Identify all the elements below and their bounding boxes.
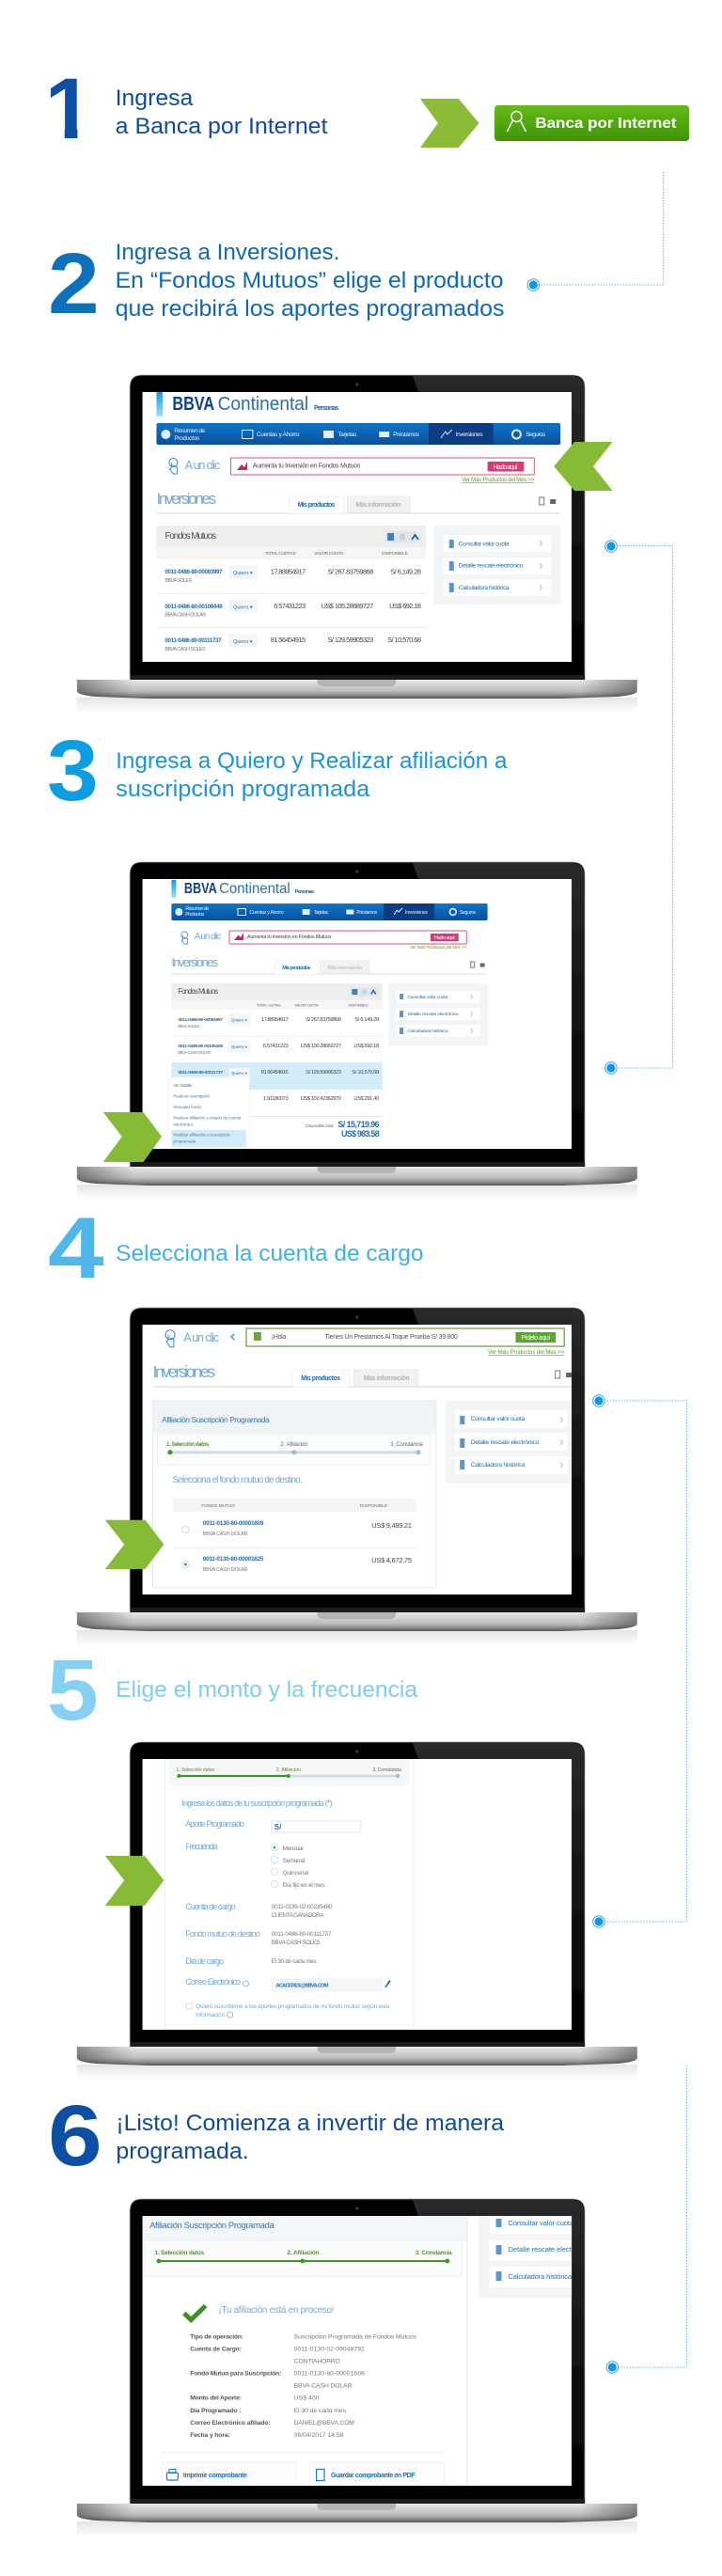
laptop: step 3 <box>77 862 637 1200</box>
arrow: step 5 chevron <box>105 1856 164 1906</box>
step 1 heading: a Banca por Internet <box>116 114 328 139</box>
screen: inversiones: S/ 6,149.28 <box>390 568 421 576</box>
screen: monto y frecuencia: Día fijo en el mes <box>283 1882 325 1889</box>
screen: inversiones: Quiero ▾ <box>233 571 253 576</box>
arrow: step 1 chevron <box>420 99 479 148</box>
step 2 number: 2 <box>48 236 100 332</box>
laptop: step 5 <box>77 1742 637 2080</box>
screen: quiero menu: Tarjetas <box>314 910 328 916</box>
screen: cuenta de cargo: DISPONIBLE <box>360 1503 387 1509</box>
screen: constancia: El 30 de cada mes <box>294 2408 347 2414</box>
screen: cuenta de cargo: 1. Selección datos <box>166 1442 210 1448</box>
screen: quiero menu: A un clic <box>195 932 221 942</box>
screen: cuenta de cargo: A un clic <box>183 1331 219 1344</box>
screen: quiero menu: Productos <box>185 912 205 918</box>
arrow: dotted connector 2 to 3 <box>617 545 673 1068</box>
screen: quiero menu: 0011-0486-80-00111737 <box>178 1070 223 1076</box>
step 2 heading: Ingresa a Inversiones. <box>116 240 339 265</box>
marker: step 2 dot <box>527 279 540 291</box>
screen: quiero menu: Disponible total <box>306 1123 333 1129</box>
screen: cuenta de cargo: Ver Más Productos del Mes >> <box>488 1349 565 1356</box>
step 4 number: 4 <box>48 1201 104 1296</box>
screen: quiero menu: Personas <box>295 889 314 895</box>
screen: cuenta de cargo: Afiliación Suscripción Programada <box>162 1415 270 1424</box>
screen: monto y frecuencia: 2. Afiliación <box>276 1767 301 1773</box>
screen: inversiones: Hazlo aquí <box>494 464 517 471</box>
screen: quiero menu: S/ 15,719.96 <box>337 1120 380 1129</box>
screen: constancia: CONTIAHORRO <box>294 2358 340 2364</box>
screen: cuenta de cargo: 0011-0130-80-00001625 <box>203 1556 264 1563</box>
laptop: step 2 <box>77 375 637 713</box>
screen: monto y frecuencia: 1. Selección datos <box>176 1767 214 1773</box>
screen: monto y frecuencia: Aporte Programado <box>185 1819 244 1829</box>
screen: cuenta de cargo: 2. Afiliación <box>280 1442 308 1448</box>
screen: inversiones: Seguros <box>526 432 546 438</box>
screen: constancia: Tipo de operación: <box>190 2333 243 2340</box>
step 3 heading: Ingresa a Quiero y Realizar afiliación a <box>116 748 508 774</box>
screen: monto y frecuencia: El 30 de cada mes <box>272 1958 317 1965</box>
screen: inversiones: Aumenta tu inversión en Fondos Mutuos <box>253 463 361 470</box>
screen: inversiones: DISPONIBLE <box>382 551 409 557</box>
screen: inversiones: Productos <box>174 435 200 442</box>
button: Banca por Internet <box>494 105 689 141</box>
screen: cuenta de cargo: Tienes Un Prestamos Al Toque Prueba S/ 39,800 <box>325 1334 458 1341</box>
screen: constancia: Día Programado : <box>190 2408 241 2414</box>
arrow: dotted connector 4 to 5 <box>604 1401 686 1922</box>
screen: cuenta de cargo: US$ 9,489.21 <box>371 1521 412 1530</box>
screen: quiero menu: Ver Detalle <box>173 1083 193 1088</box>
screen: cuenta de cargo <box>143 1325 572 1594</box>
screen: inversiones: Mis productos <box>298 502 336 509</box>
screen: quiero menu: US$ 100.28669727 <box>301 1044 341 1049</box>
step 6 heading <box>116 2111 505 2164</box>
step 2 heading: que recibirá los aportes programados <box>116 296 505 322</box>
screen: constancia: 2. Afiliación <box>287 2250 320 2256</box>
screen: constancia <box>143 2216 590 2490</box>
screen: quiero menu: US$ 983.58 <box>341 1129 380 1139</box>
screen: cuenta de cargo: Pídelo aquí <box>521 1335 550 1342</box>
screen: quiero menu: BBVA <box>184 881 217 897</box>
step 3 heading: suscripción programada <box>116 777 370 802</box>
screen: inversiones: US$ 105.28689727 <box>322 602 373 610</box>
step 4 heading: Selecciona la cuenta de cargo <box>116 1241 423 1266</box>
arrow: dotted connector 5 to 6 <box>618 2066 686 2367</box>
screen: quiero menu: Continental <box>219 881 290 897</box>
screen: constancia: Calculadora histórica <box>508 2272 573 2281</box>
screen: inversiones: Quiero ▾ <box>233 605 253 611</box>
step 6 number: 6 <box>48 2088 102 2184</box>
screen: inversiones: Resumen de <box>174 428 205 434</box>
screen: quiero menu: electrónico <box>173 1122 194 1127</box>
screen: quiero menu: S/ 267.83759868 <box>306 1017 341 1023</box>
screen: monto y frecuencia: 0011-0199-02-00235480 <box>272 1904 333 1910</box>
screen: quiero menu: Hazlo aquí <box>434 935 455 941</box>
marker: step 6 dot <box>606 2362 619 2373</box>
screen: constancia: Suscripción Programada de Fondos Mutuos <box>294 2333 417 2340</box>
screen: quiero menu: S/ 6,149.28 <box>354 1017 379 1023</box>
screen: quiero menu: 0011-0486-80-00083997 <box>178 1017 223 1023</box>
screen: quiero menu: programada <box>173 1139 196 1144</box>
screen: cuenta de cargo: BBVA CASH DOLAR <box>203 1567 248 1573</box>
screen: quiero menu: VALOR CUOTA <box>294 1002 319 1008</box>
button: Banca por Internet: Banca por Internet <box>535 116 677 132</box>
screen: quiero menu: Inversiones <box>171 955 219 969</box>
screen: quiero menu: Realizar suscripción <box>173 1093 211 1099</box>
screen: inversiones: BBVA SOLES <box>165 578 193 584</box>
screen: constancia: Fecha y hora: <box>190 2432 230 2439</box>
screen: cuenta de cargo: Más información <box>364 1375 410 1382</box>
screen: cuenta de cargo: 0011-0130-80-00001609 <box>203 1520 264 1527</box>
screen: quiero menu: 1.91180073 <box>263 1096 289 1102</box>
screen: cuenta de cargo: BBVA CASH DOLAR <box>203 1531 248 1537</box>
screen: quiero menu: Seguros <box>460 910 477 916</box>
screen: inversiones: Préstamos <box>393 432 420 438</box>
screen: cuenta de cargo: ¡Hola <box>272 1334 286 1341</box>
screen: monto y frecuencia: Quiero suscribirme a los aportes programados de mi fondo mutuo según esta <box>196 2003 390 2010</box>
screen: quiero menu: Inversiones <box>405 910 428 916</box>
screen: inversiones: Más información <box>355 502 400 509</box>
step 2 heading <box>116 240 505 322</box>
screen: inversiones: 6.57431223 <box>274 602 306 610</box>
screen: inversiones: Detalle rescate electrónico <box>459 562 524 570</box>
screen: inversiones: Personas <box>314 405 339 412</box>
screen: quiero menu: 0011-0486-80-00109449 <box>178 1044 223 1049</box>
screen: quiero menu: Quiero ▾ <box>231 1071 247 1076</box>
screen: inversiones: BBVA CASH SOLES <box>165 647 206 652</box>
screen: monto y frecuencia: Frecuencia <box>185 1842 218 1851</box>
screen: quiero menu: BBVA CASH DOLAR <box>178 1050 211 1055</box>
step 3 number: 3 <box>47 723 99 819</box>
screen: quiero menu <box>143 879 572 1149</box>
screen: inversiones: A un clic <box>185 459 220 472</box>
screen: inversiones: 17.88954917 <box>271 568 306 576</box>
screen: constancia: Imprimir comprobante <box>183 2473 247 2479</box>
screen: constancia: US$ 400 <box>294 2395 320 2402</box>
screen: quiero menu: 17.88954917 <box>261 1017 289 1023</box>
screen: quiero menu: TOTAL CUOTAS <box>257 1002 281 1008</box>
screen: monto y frecuencia: Mensual <box>283 1846 304 1852</box>
screen: quiero menu: S/ 129.59906323 <box>306 1070 341 1076</box>
screen: constancia: Consultar valor cuota <box>508 2219 574 2227</box>
screen: monto y frecuencia: CUENTA GANADORA <box>272 1912 324 1919</box>
screen: cuenta de cargo: Calculadora histórica <box>471 1462 526 1469</box>
screen: cuenta de cargo: Mis productos <box>301 1375 340 1382</box>
screen: quiero menu: US$ 102.42362970 <box>301 1096 341 1102</box>
screen: constancia: Monto del Aporte: <box>190 2395 242 2402</box>
screen: monto y frecuencia: 0011-0486-80-00111737 <box>272 1931 332 1938</box>
screen: constancia: 3. Constancia <box>416 2250 452 2256</box>
screen: inversiones: 0011-0486-80-00111737 <box>165 637 222 644</box>
screen: quiero menu: Consultar valor cuota <box>407 995 447 1000</box>
step 6 heading: ¡Listo! Comienza a invertir de manera <box>116 2111 505 2136</box>
screen: inversiones: Quiero ▾ <box>233 639 253 645</box>
screen: cuenta de cargo: US$ 4,672.75 <box>371 1556 412 1564</box>
screen: quiero menu: 81.56454915 <box>261 1070 289 1076</box>
screen: monto y frecuencia: ACACERES@BBVA.COM <box>275 1983 329 1989</box>
screen: constancia: Guardar comprobante en PDF <box>331 2473 416 2479</box>
marker: step 3 dot bottom <box>605 1062 617 1074</box>
screen: quiero menu: Cuentas y Ahorro <box>249 910 284 916</box>
arrow: step 4 chevron <box>105 1520 164 1569</box>
screen: monto y frecuencia: Día de cargo <box>185 1956 224 1966</box>
screen: quiero menu: Realizar afiliación a estado de cuenta <box>173 1115 242 1121</box>
laptop: step 4 <box>77 1308 637 1645</box>
screen: constancia: Fondo Mutuo para Suscripción: <box>190 2371 281 2378</box>
screen: inversiones: US$ 692.18 <box>389 602 421 610</box>
screen: constancia: 0011-0130-02-09048792 <box>294 2346 365 2352</box>
screen: constancia: Afiliación Suscripción Programada <box>149 2221 275 2231</box>
screen: cuenta de cargo: 3. Constancia <box>390 1442 424 1448</box>
screen: quiero menu: Más información <box>327 966 362 971</box>
screen: monto y frecuencia: Correo Electrónico <box>185 1977 241 1987</box>
screen: inversiones: 0011-0486-80-00109449 <box>165 604 223 610</box>
arrow: step 2 chevron <box>554 442 613 491</box>
screen: quiero menu: US$ 692.18 <box>353 1044 379 1049</box>
screen: quiero menu: Aumenta tu inversión en Fondos Mutuos <box>247 935 332 940</box>
screen: constancia: 1. Selección datos <box>154 2250 205 2256</box>
screen: monto y frecuencia <box>143 1759 572 2030</box>
screen: quiero menu: Ver Más Productos del Mes >> <box>410 945 466 950</box>
screen: constancia: DANIEL@BBVA.COM <box>294 2420 354 2427</box>
screen: inversiones: Tarjetas <box>337 432 357 438</box>
screen: constancia: 0011-0130-80-00001609 <box>294 2371 365 2378</box>
step 5 number: 5 <box>47 1642 99 1738</box>
step 1 heading: Ingresa <box>116 86 194 111</box>
marker: step 4 dot <box>593 1395 604 1406</box>
marker: step 5 dot <box>593 1916 604 1927</box>
screen: monto y frecuencia: Ingresa los datos de tu suscripción programada (*) <box>181 1798 332 1808</box>
marker: step 3 dot top <box>605 541 617 552</box>
screen: quiero menu: US$ 291.40 <box>353 1096 379 1102</box>
step 3 heading <box>116 748 508 802</box>
screen: inversiones: Continental <box>218 394 308 415</box>
screen: inversiones: Calculadora histórica <box>459 585 510 591</box>
screen: monto y frecuencia: BBVA CASH SOLES <box>272 1940 321 1946</box>
screen: quiero menu: Quiero ▾ <box>231 1017 247 1023</box>
screen: constancia: Detalle rescate electrónico <box>508 2245 590 2254</box>
screen: monto y frecuencia: S/ <box>275 1823 282 1831</box>
screen: constancia: ¡Tu afiliación está en proceso! <box>218 2305 334 2316</box>
screen: inversiones: Inversiones <box>156 490 216 508</box>
step 1 number: 1 <box>45 61 93 157</box>
screen: inversiones: TOTAL CUOTAS <box>265 551 296 557</box>
screen: inversiones: BBVA <box>172 394 214 415</box>
screen: inversiones <box>143 392 572 662</box>
screen: inversiones: Inversiones <box>456 432 483 438</box>
screen: constancia: Cuenta de Cargo: <box>190 2346 242 2352</box>
screen: quiero menu: BBVA SOLES <box>178 1024 199 1029</box>
screen: monto y frecuencia: Cuenta de cargo <box>185 1902 236 1911</box>
screen: quiero menu: Fondos Mutuos <box>178 987 218 996</box>
step 6 heading: programada. <box>116 2139 249 2164</box>
screen: monto y frecuencia: Semanal <box>283 1858 305 1864</box>
screen: inversiones: Fondos Mutuos <box>165 531 216 542</box>
screen: inversiones: Ver Más Productos del Mes >> <box>462 478 535 483</box>
screen: quiero menu: Rescatar fondo <box>173 1105 202 1109</box>
screen: constancia: Correo Electrónico afiliado: <box>190 2420 271 2427</box>
screen: inversiones: 0011-0486-80-00083997 <box>165 569 223 575</box>
screen: inversiones: VALOR CUOTA <box>314 551 344 557</box>
arrow: step 3 chevron <box>103 1112 162 1162</box>
screen: cuenta de cargo: Consultar valor cuota <box>471 1416 526 1422</box>
screen: monto y frecuencia: Fondo mutuo de destino <box>185 1929 260 1939</box>
screen: inversiones: S/ 267.83759868 <box>327 568 373 576</box>
screen: monto y frecuencia: información <box>196 2012 225 2018</box>
screen: quiero menu: Realizar afiliación a suscripción <box>173 1132 230 1138</box>
laptop: step 6 <box>77 2199 637 2537</box>
step 5 heading: Elige el monto y la frecuencia <box>116 1677 418 1703</box>
arrow: dotted connector 1 to 2 <box>539 172 664 285</box>
screen: quiero menu: Detalle rescate electrónico <box>407 1012 459 1017</box>
screen: quiero menu: Quiero ▾ <box>231 1045 247 1049</box>
screen: quiero menu: Préstamos <box>356 910 378 916</box>
step 2 heading: En “Fondos Mutuos” elige el producto <box>116 268 504 293</box>
screen: cuenta de cargo: Detalle rescate electrónico <box>471 1439 540 1446</box>
step 1 heading <box>116 86 328 139</box>
screen: cuenta de cargo: Inversiones <box>152 1362 215 1381</box>
screen: inversiones: Consultar valor cuota <box>459 541 510 548</box>
screen: monto y frecuencia: 3. Constancia <box>372 1767 402 1773</box>
screen: quiero menu: DISPONIBLE <box>348 1002 369 1008</box>
screen: cuenta de cargo: FONDO MUTUO <box>201 1503 235 1509</box>
screen: cuenta de cargo: Selecciona el fondo mutuo de destino. <box>172 1475 303 1485</box>
screen: inversiones: S/ 10,570.68 <box>387 636 421 644</box>
screen: monto y frecuencia: Quincenal <box>283 1870 308 1877</box>
screen: constancia: 06/04/2017 14:58 <box>294 2432 344 2439</box>
screen: inversiones: BBVA CASH DOLAR <box>165 612 206 619</box>
screen: quiero menu: Calculadora histórica <box>407 1029 447 1034</box>
screen: inversiones: 81.56454915 <box>271 636 306 644</box>
screen: inversiones: Cuentas y Ahorro <box>257 432 300 438</box>
screen: quiero menu: S/ 10,570.68 <box>352 1070 379 1076</box>
screen: constancia: BBVA CASH DOLAR <box>294 2383 352 2390</box>
screen: quiero menu: Mis productos <box>282 966 311 971</box>
screen: quiero menu: Resumen de <box>185 906 209 912</box>
screen: quiero menu: 6.57431223 <box>263 1044 289 1049</box>
screen: inversiones: S/ 129.59905323 <box>327 636 373 644</box>
